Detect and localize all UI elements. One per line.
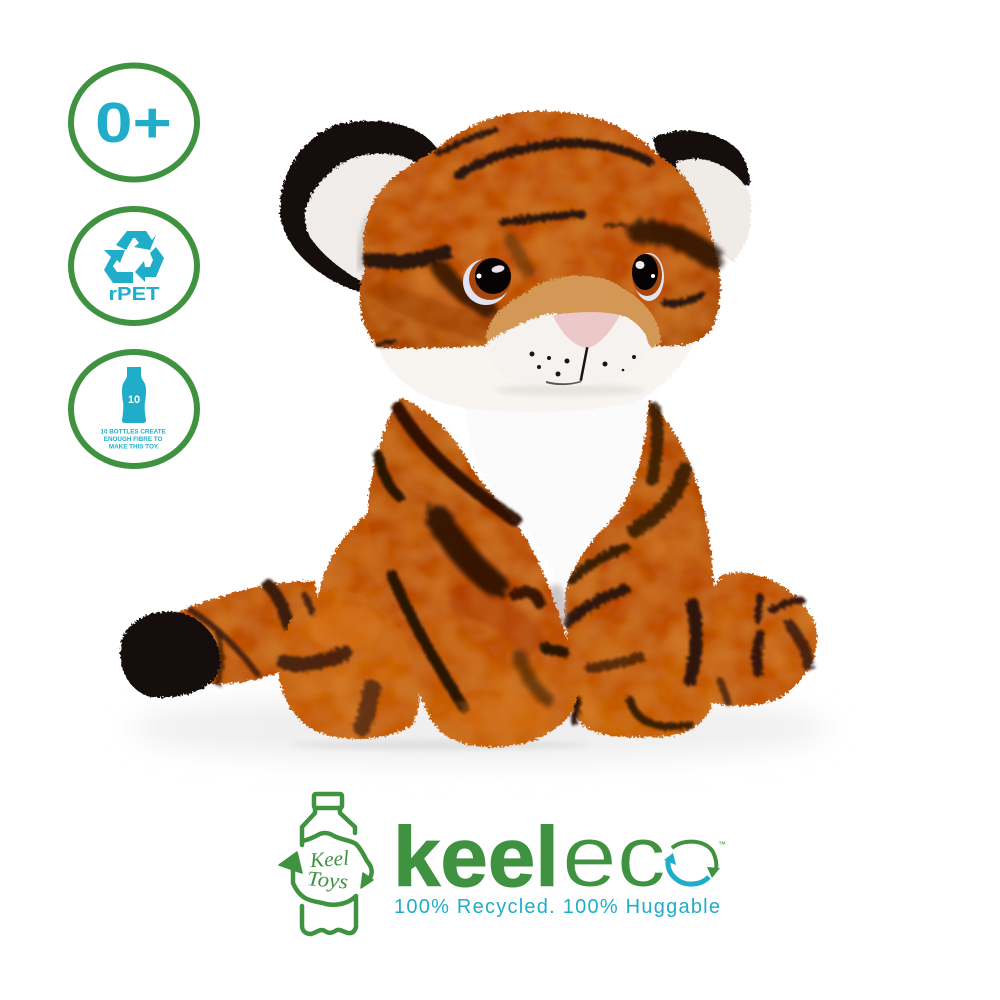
right front leg and shoulder	[564, 400, 716, 737]
right eye	[632, 253, 664, 301]
muzzle shadow	[495, 384, 645, 396]
icon: bottle	[122, 367, 146, 423]
icon: recycling arrows	[104, 231, 164, 283]
age badge: 0+: 0+	[95, 91, 172, 155]
pink nose	[553, 312, 620, 348]
left hind leg	[300, 510, 405, 660]
tan muzzle top	[486, 276, 661, 348]
ear inner shading	[362, 215, 375, 270]
white cheeks	[376, 320, 695, 412]
plush tiger illustration	[120, 111, 830, 762]
rPET recycling badge: rPET	[108, 284, 160, 304]
tagline: 100% Recycled. 100% Huggable	[394, 896, 720, 918]
ear inner white	[675, 159, 751, 262]
bottle caption: 10 BOTTLES CREATE	[100, 428, 166, 436]
head	[359, 111, 720, 348]
shadow between legs	[545, 584, 567, 636]
floor shadow	[130, 694, 830, 762]
icon: arrow head green	[707, 867, 720, 878]
ten bottles badge	[71, 352, 197, 466]
keeleco wordmark	[393, 808, 726, 905]
mouth and whisker dots	[530, 347, 636, 385]
keel toys wordmark	[306, 846, 350, 894]
arrow head right	[361, 873, 373, 888]
ear inner white	[305, 154, 420, 282]
hind foot highlight	[309, 604, 381, 652]
icon: recycling o blue arc	[668, 861, 709, 884]
bottle caption: ENOUGH FIBRE TO	[104, 436, 163, 443]
keel toys wordmark: Toys	[306, 866, 349, 894]
head stripes	[370, 130, 702, 345]
left ear	[280, 121, 438, 292]
ten bottles badge: 10	[128, 394, 140, 406]
dark leg patches	[438, 518, 548, 700]
tail right	[705, 573, 817, 706]
bottle shoulder	[302, 808, 355, 845]
ear outer black	[280, 121, 438, 292]
keeleco wordmark: keel	[393, 810, 559, 904]
right ear	[652, 131, 751, 262]
left hind foot	[278, 591, 419, 739]
age badge: 0+	[71, 66, 197, 180]
icon: recycling o green arc	[672, 842, 716, 870]
icon: arrow head blue	[664, 853, 676, 865]
keeleco wordmark: ec	[562, 808, 666, 905]
keel toys bottle logo	[279, 794, 373, 934]
head dark patches	[390, 232, 712, 328]
white muzzle	[487, 314, 648, 385]
wavy bottom and base	[293, 870, 356, 934]
keel toys wordmark: Keel	[308, 846, 350, 872]
arrow head left	[279, 852, 302, 873]
left front leg and shoulder	[368, 398, 580, 747]
left eye	[463, 258, 511, 305]
white chest	[464, 400, 648, 595]
bottle cap	[314, 794, 342, 808]
keeleco wordmark: ™	[718, 840, 726, 849]
fluffy highlight on toes	[450, 698, 550, 734]
tail left	[120, 581, 322, 698]
bottle caption: MAKE THIS TOY.	[109, 444, 159, 450]
tail tip black	[120, 611, 220, 698]
wavy top	[302, 833, 372, 878]
rPET recycling badge	[71, 209, 197, 323]
ear outer black	[652, 131, 750, 190]
